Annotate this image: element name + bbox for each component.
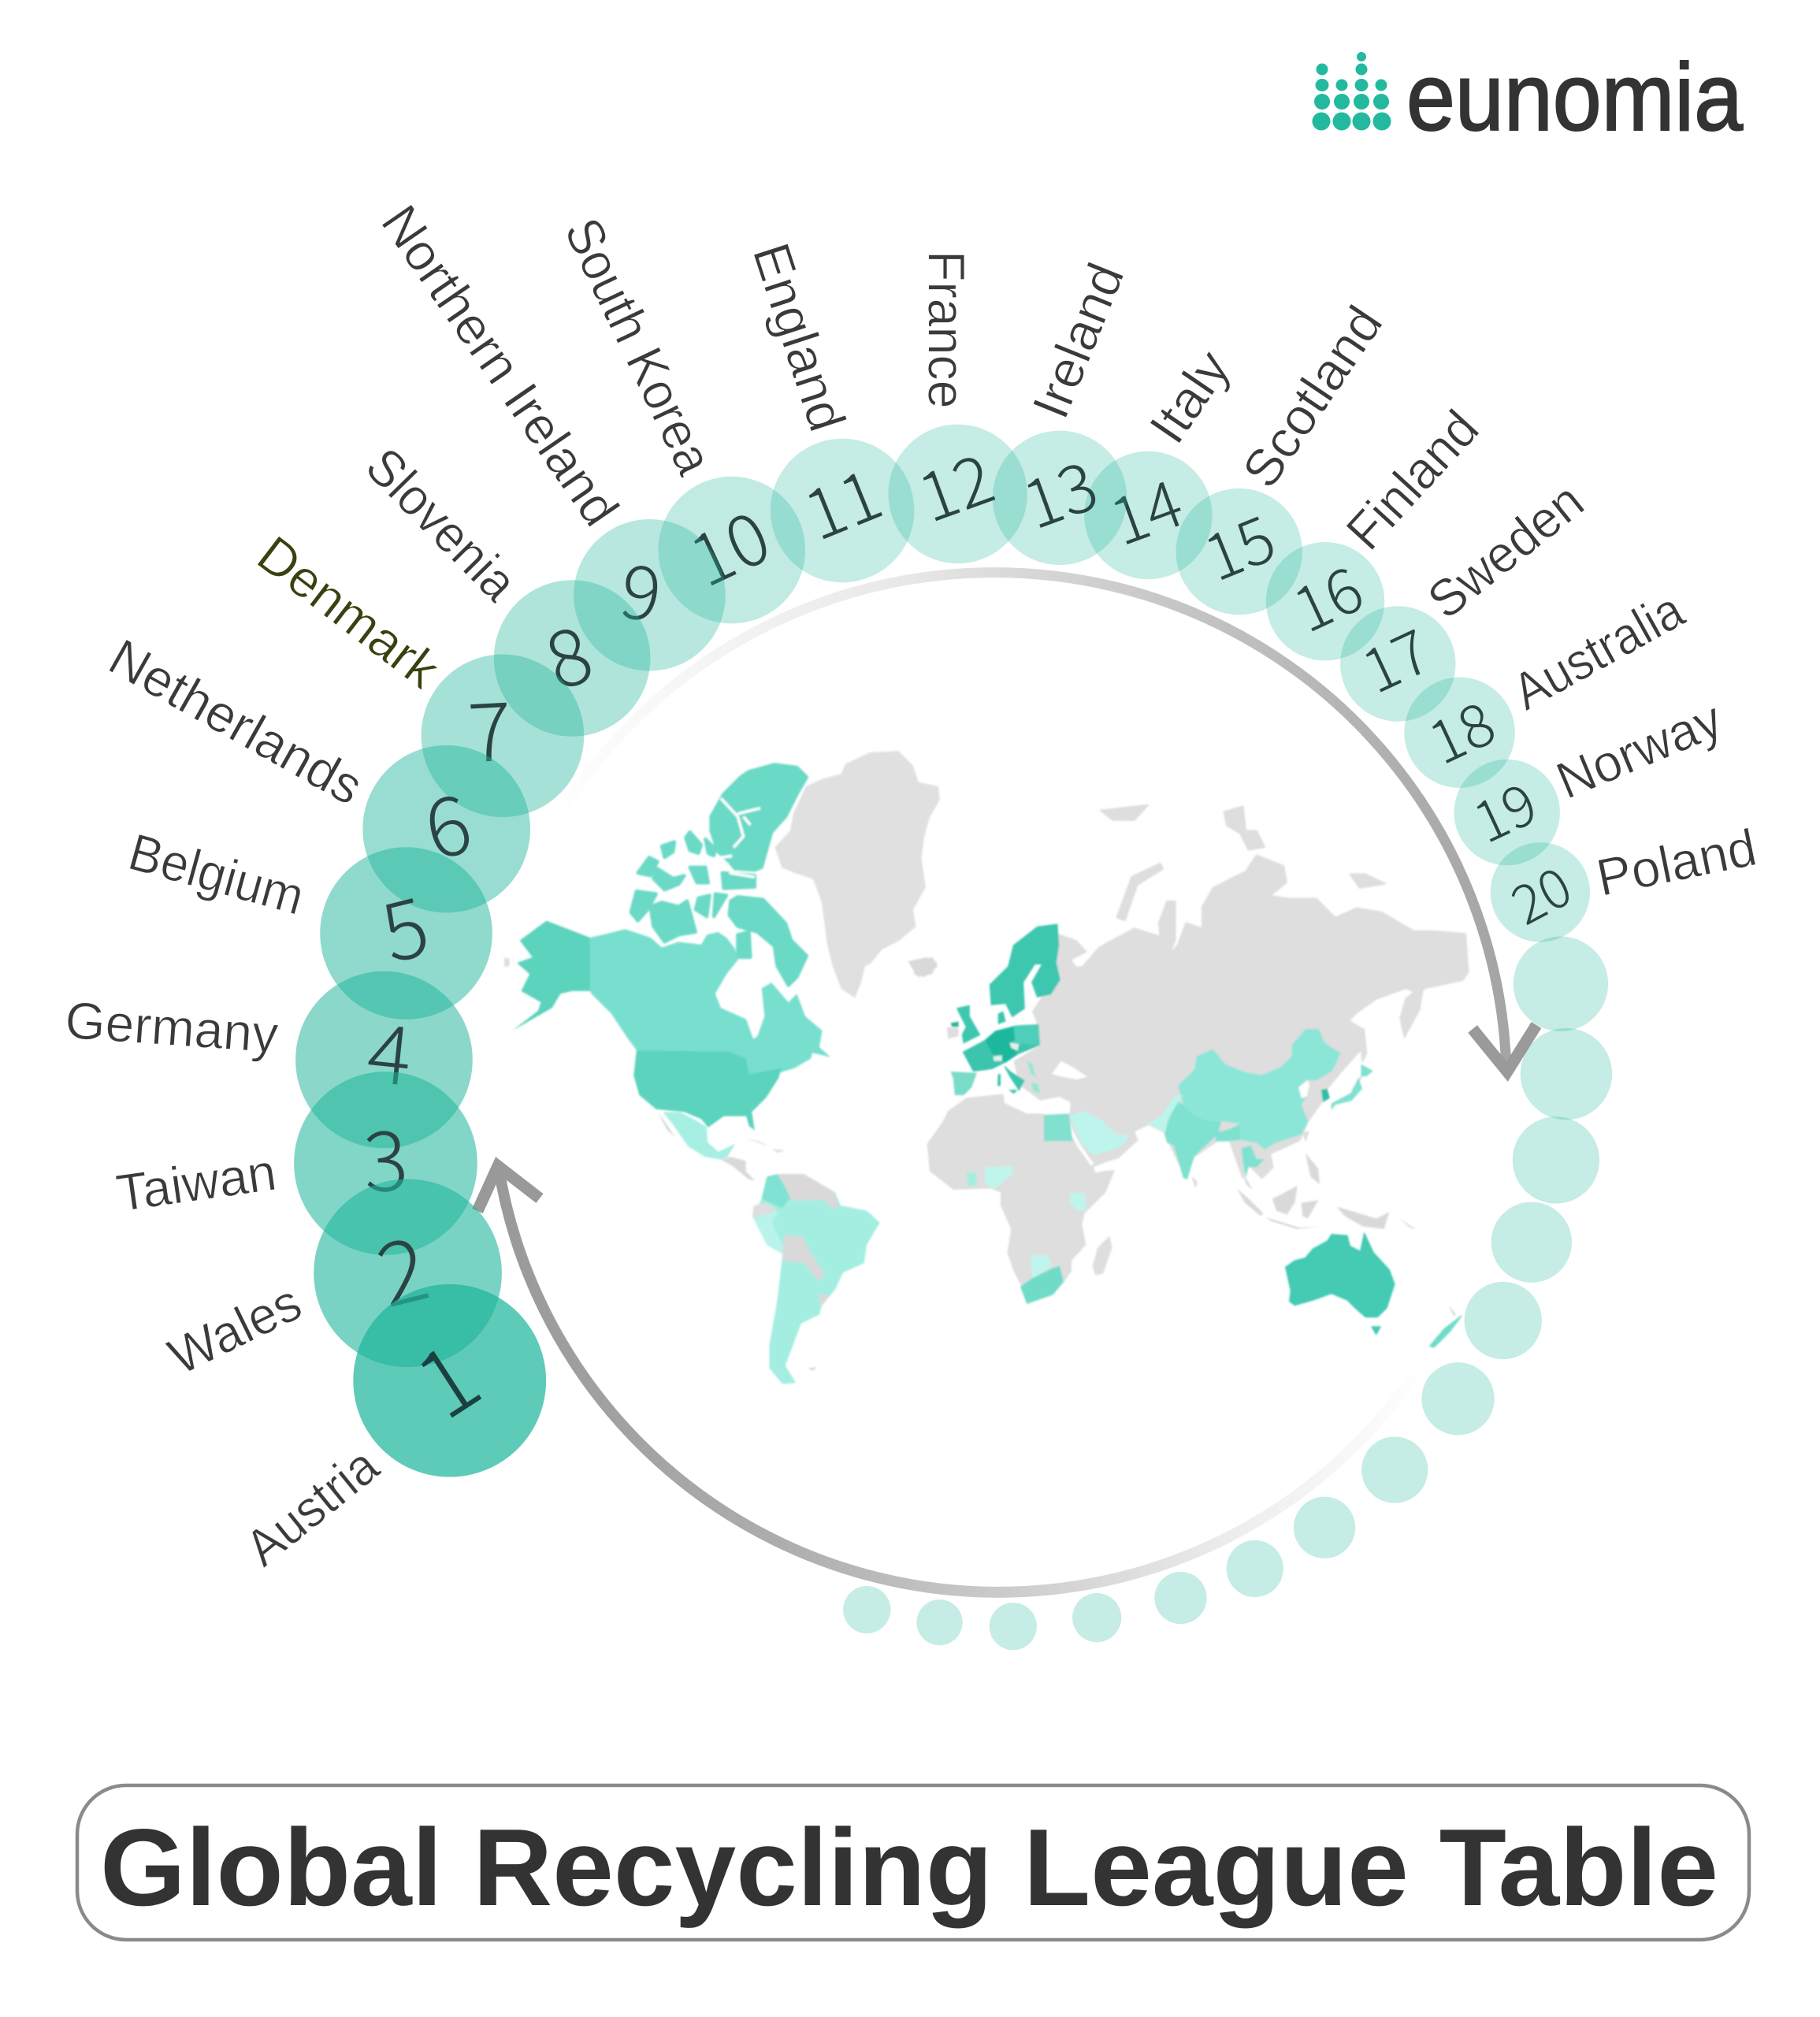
ranked circles 20 to 1: 16 — [1276, 540, 1376, 650]
country labels: France — [917, 251, 975, 409]
icon: logo dots — [1313, 52, 1391, 131]
ranked circles 20 to 1: 8 — [529, 592, 604, 712]
country labels: Italy — [1138, 340, 1242, 454]
map: Eurasia — [1050, 805, 1468, 1187]
country labels: England — [741, 236, 856, 438]
ranked circles 20 to 1: 15 — [1189, 488, 1287, 600]
country labels: Denmark — [247, 525, 451, 700]
ranked circles 20 to 1: 5 — [368, 860, 439, 986]
map: western Eurasia and Europe — [914, 924, 1150, 1135]
country labels: Northern Ireland — [370, 195, 630, 537]
ranked circles 20 to 1: 12 — [903, 424, 1005, 541]
ranked circles 20 to 1: 4 — [362, 987, 418, 1109]
ranked circles 20 to 1: 6 — [411, 758, 482, 883]
world map — [504, 752, 1468, 1384]
ranked circles 20 to 1: 2 — [363, 1198, 440, 1333]
country labels: Wales — [160, 1273, 310, 1387]
arrow: upper arc — [542, 573, 1536, 1072]
country labels: Australia — [1503, 581, 1693, 722]
ranked circles 20 to 1: 1 — [387, 1306, 502, 1446]
arrowhead: right — [1473, 1025, 1536, 1072]
country labels: Germany — [63, 991, 280, 1064]
country labels: Scotland — [1231, 296, 1395, 498]
map: Latin America — [658, 1113, 880, 1384]
map: Canadian Arctic islands — [631, 764, 807, 986]
country labels: Ireland — [1021, 255, 1136, 426]
ranked circles 20 to 1: 9 — [615, 532, 669, 644]
ranked circles 20 to 1: 11 — [788, 440, 894, 560]
country labels: Norway — [1548, 690, 1730, 811]
ranked circles 20 to 1: 18 — [1413, 677, 1506, 782]
country labels: Poland — [1592, 819, 1762, 908]
ranked circles 20 to 1: 17 — [1346, 604, 1443, 711]
ranked circles 20 to 1: 20 — [1496, 845, 1584, 940]
ranked circles 20 to 1: 14 — [1095, 451, 1194, 564]
map: Africa and Arabia — [927, 1094, 1137, 1304]
country labels: Netherlands — [99, 628, 373, 816]
map: Asia highlights — [1148, 1029, 1373, 1179]
arrow: lower arc — [477, 1166, 1428, 1592]
title panel — [77, 1785, 1749, 1940]
map: Canada — [590, 929, 830, 1074]
logo: eunomia — [1313, 43, 1743, 150]
ranked circles 20 to 1 — [294, 424, 1590, 1477]
ranked circles 20 to 1: 3 — [358, 1094, 411, 1217]
ranked circles 20 to 1: 13 — [1008, 432, 1109, 548]
country labels: Slovenia — [355, 436, 529, 612]
ranked circles 20 to 1: 19 — [1458, 759, 1548, 859]
ranked circles 20 to 1: 7 — [465, 666, 514, 786]
title: Global Recycling League Table — [100, 1807, 1718, 1929]
country labels: Finland — [1335, 399, 1491, 561]
map: North America — [504, 752, 939, 1131]
arrowhead: left — [477, 1166, 540, 1211]
country labels: Taiwan — [113, 1143, 280, 1223]
ranked circles 20 to 1: 10 — [671, 481, 785, 607]
country labels: Belgium — [122, 823, 310, 927]
logo wordmark: eunomia — [1406, 43, 1743, 150]
map: Alaska — [513, 921, 590, 1031]
country labels: Austria — [235, 1436, 390, 1578]
map: Australia — [1286, 1233, 1395, 1317]
country labels — [63, 195, 1762, 1578]
map: USA — [633, 1050, 782, 1131]
country labels: Sweden — [1417, 472, 1595, 630]
country labels: South Korea — [553, 210, 724, 484]
trailing circles — [843, 937, 1612, 1650]
map: Southeast Asia and Oceania — [1237, 1153, 1462, 1347]
